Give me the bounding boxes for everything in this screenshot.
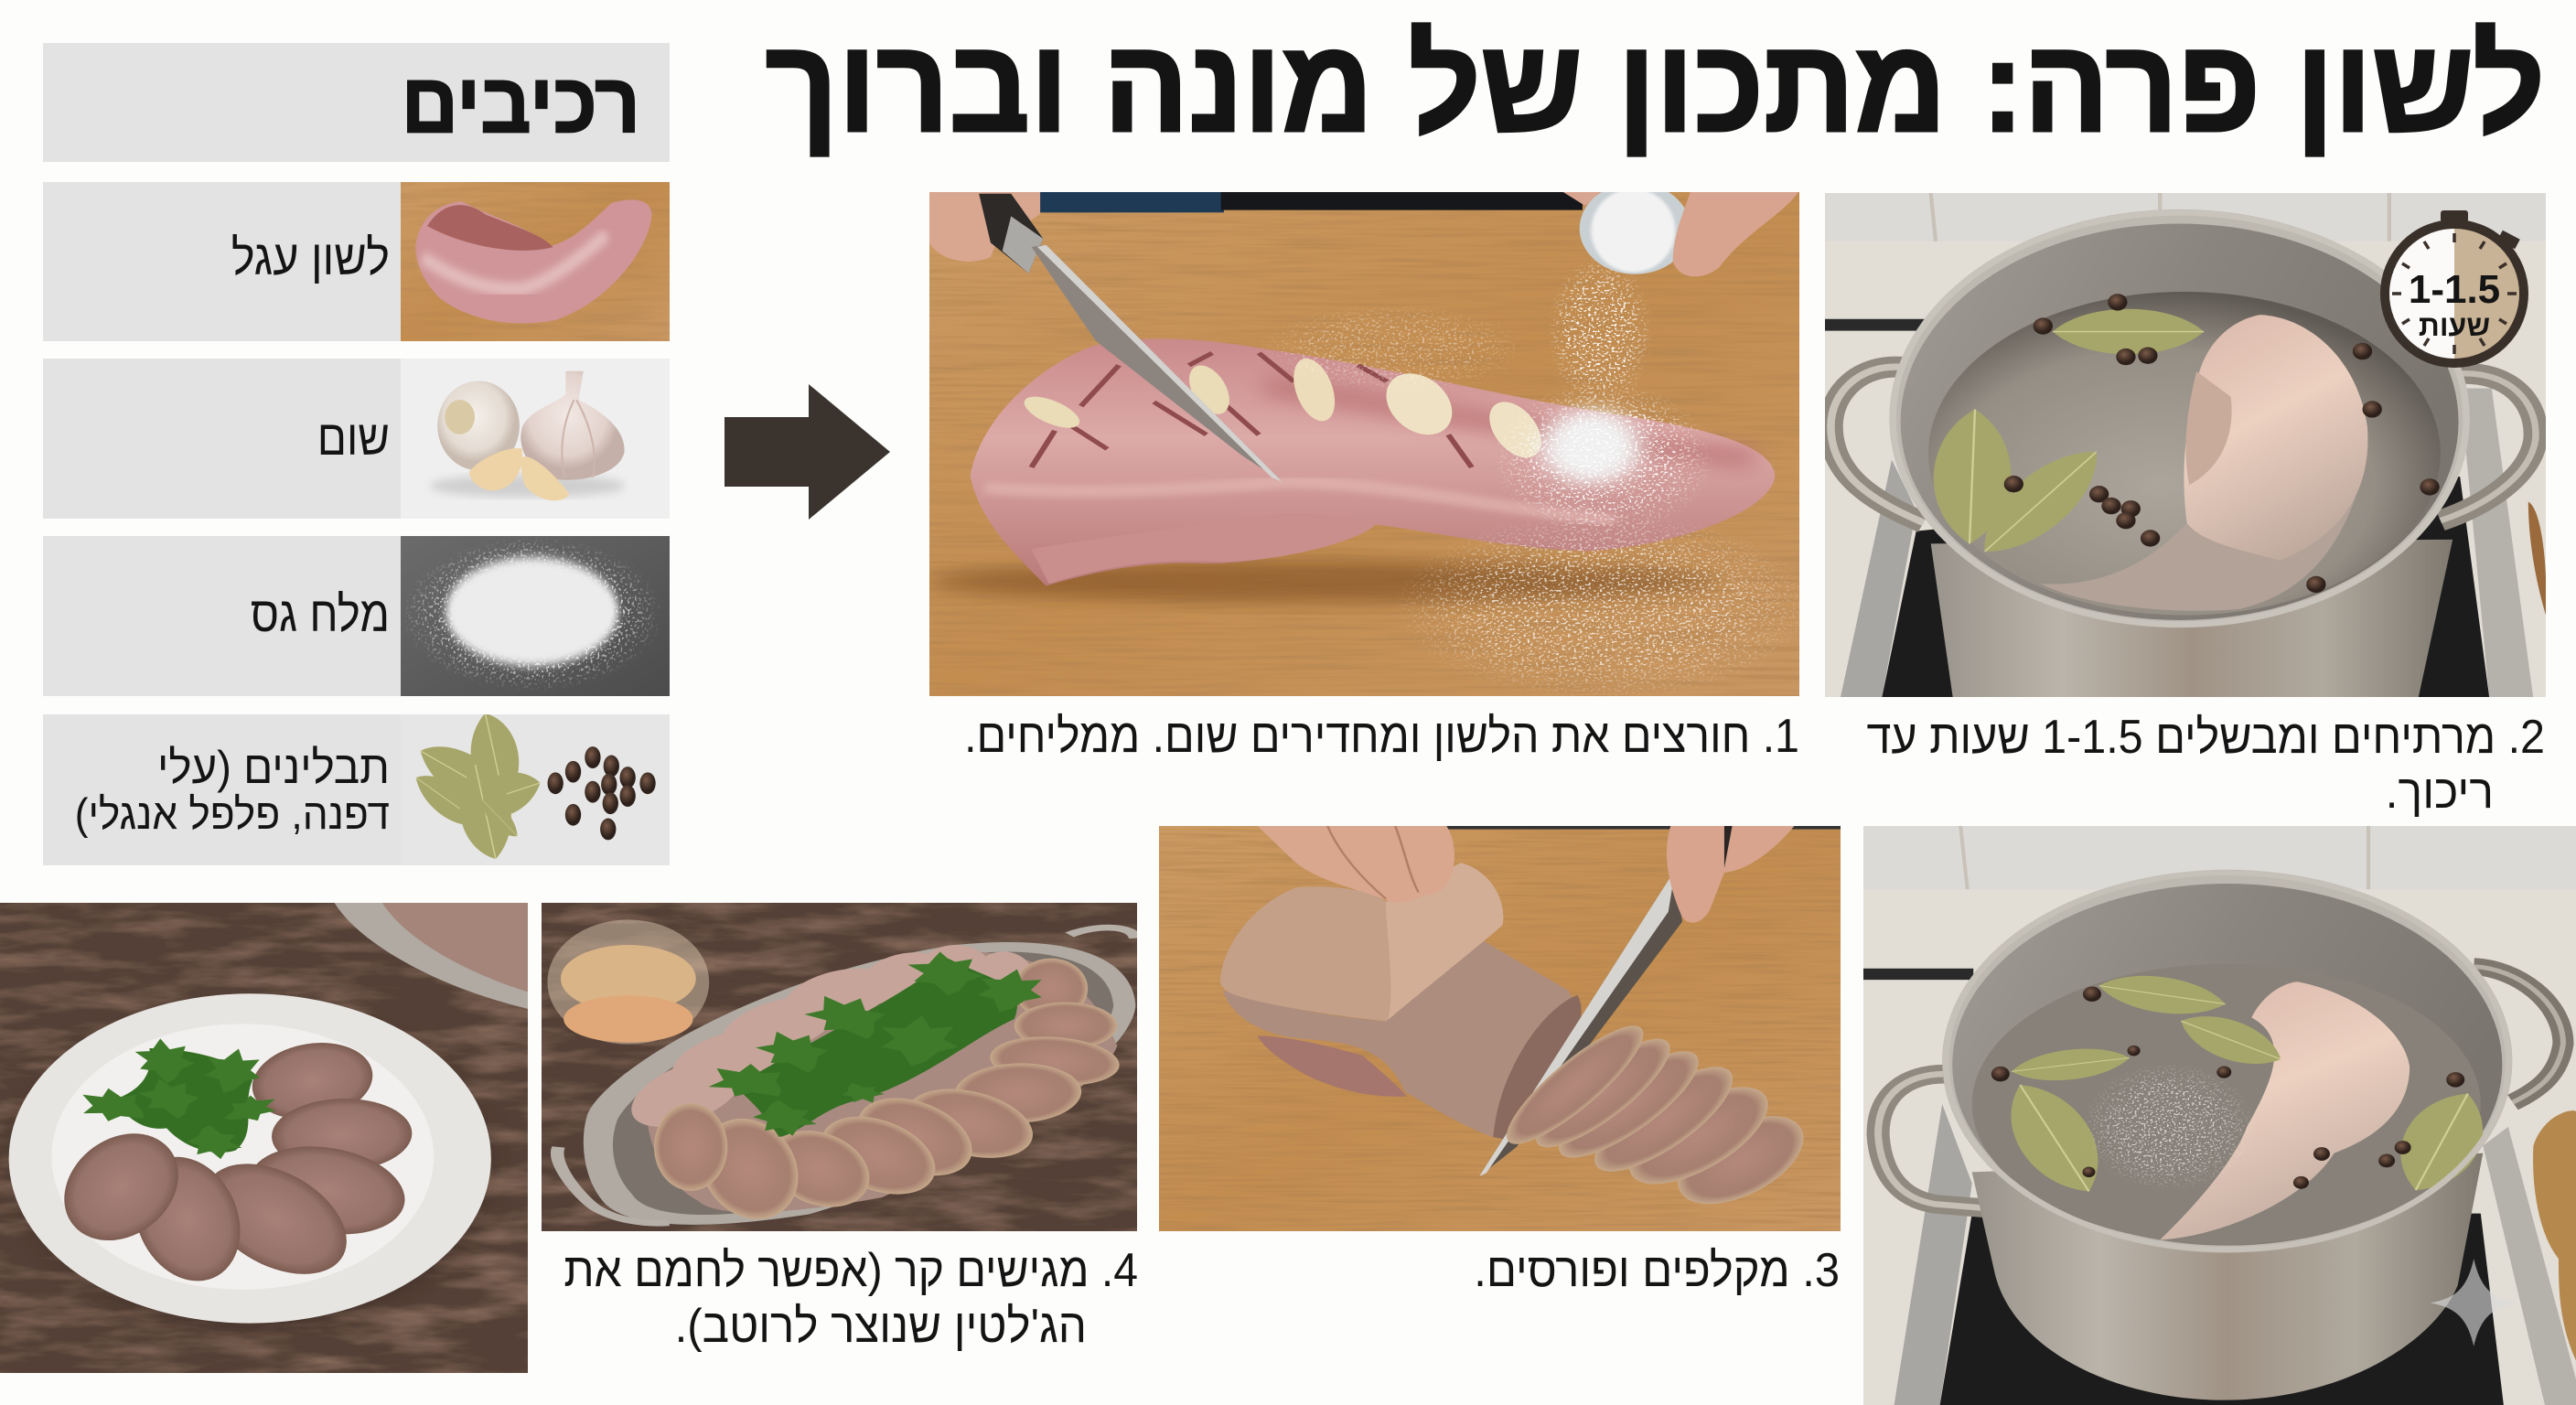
- panel: ingredients: [43, 43, 670, 867]
- ingredients heading: [43, 43, 670, 162]
- photo: coarse salt: [401, 536, 670, 696]
- watermark sparkle: [2431, 1259, 2517, 1346]
- bottom-right photo: pot with tongue: [1863, 826, 2576, 1405]
- step 3 photo: peeling and slicing: [1159, 826, 1841, 1231]
- ingredient row: coarse salt: מלח גס: [251, 586, 390, 642]
- ingredient row: veal tongue: לשון עגל: [231, 230, 390, 285]
- step 4 photo: sliced tongue on silver platter: [542, 903, 1137, 1231]
- photo: garlic: [401, 359, 670, 519]
- ingredient row: spices: [43, 705, 670, 867]
- step 2 caption: 2. מרתיחים ומבשלים 1-1.5 שעות עד: [1867, 710, 2545, 763]
- ingredient row: veal tongue: [43, 182, 670, 341]
- photo: bay leaves and allspice: [401, 714, 670, 865]
- step 3 caption: 3. מקלפים ופורסים.: [1474, 1243, 1840, 1296]
- ingredient row: garlic: שום: [317, 410, 390, 466]
- step 2 caption: ריכוך.: [2386, 765, 2494, 818]
- step 1 caption: 1. חורצים את הלשון ומחדירים שום. ממליחים.: [964, 709, 1799, 762]
- arrow: [724, 384, 890, 520]
- step 4 caption: [564, 1243, 1138, 1352]
- ingredient row: spices: דפנה, פלפל אנגלי): [75, 790, 390, 838]
- ingredient row: garlic: [43, 359, 670, 519]
- step 4 caption: הג'לטין שנוצר לרוטב).: [675, 1299, 1087, 1352]
- icon: stopwatch 1-1.5 hours: שעות: [2419, 309, 2490, 342]
- step 4 caption: 4. מגישים קר (אפשר לחמם את: [564, 1243, 1138, 1296]
- step 2 caption: [1867, 710, 2545, 818]
- ingredient row: spices: תבלינים (עלי: [157, 743, 390, 793]
- final plate photo: [0, 903, 528, 1373]
- ingredients heading: רכיבים: [402, 56, 640, 150]
- icon: stopwatch 1-1.5 hours: [2385, 210, 2524, 363]
- photo: raw tongue: [401, 182, 670, 341]
- step 2 photo: tongue simmering in pot: [1825, 193, 2546, 703]
- step 1 photo: scoring and salting tongue: [929, 192, 1799, 696]
- title: לשון פרה: מתכון של מונה וברוך: [766, 11, 2545, 159]
- ingredient row: coarse salt: [43, 536, 670, 696]
- icon: stopwatch 1-1.5 hours: 1-1.5: [2409, 267, 2500, 312]
